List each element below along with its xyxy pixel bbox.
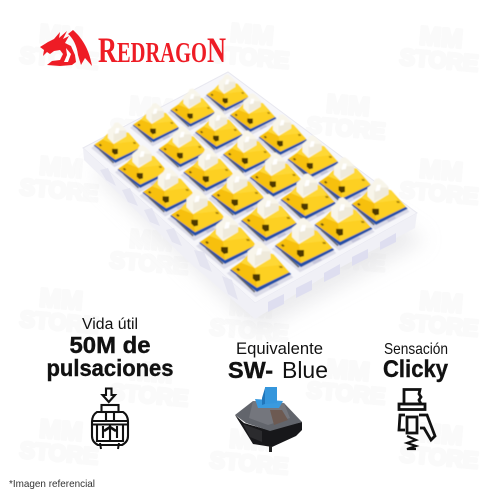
watermark pattern: MM: [228, 290, 274, 324]
text: Equivalente SW- Blue: Blue: [282, 357, 328, 383]
watermark pattern: STORE: [19, 306, 100, 338]
watermark pattern: STORE: [209, 447, 290, 479]
watermark pattern: MM: [325, 353, 371, 387]
text: Sensación Clicky: [383, 341, 449, 383]
watermark pattern: STORE: [399, 309, 480, 341]
watermark pattern: MM: [38, 413, 84, 447]
watermark pattern: STORE: [306, 244, 387, 276]
transparent switch plate with 24 yellow switches: [83, 72, 417, 319]
watermark pattern: MM: [228, 160, 274, 194]
watermark pattern: STORE: [19, 174, 100, 206]
watermark pattern: MM: [418, 20, 464, 54]
text: Equivalente SW- Blue: SW-: [228, 357, 273, 383]
watermark pattern: MM: [325, 88, 371, 122]
text: Sensación Clicky: Clicky: [383, 356, 449, 383]
text: Vida útil 50M de pulsaciones: [46, 316, 174, 381]
watermark pattern: MM: [229, 17, 275, 51]
watermark pattern: STORE: [209, 184, 290, 216]
watermark pattern: MM: [418, 153, 464, 187]
watermark pattern: STORE: [306, 112, 387, 144]
icon: blue mechanical switch: [235, 387, 302, 452]
watermark pattern: STORE: [209, 314, 290, 346]
watermark pattern: STORE: [399, 44, 480, 76]
plate shadow: [90, 160, 425, 330]
watermark pattern: STORE: [19, 42, 100, 74]
watermark pattern: STORE: [109, 379, 190, 411]
watermark pattern: STORE: [210, 41, 290, 73]
text: Equivalente SW- Blue: Equivalente: [236, 340, 323, 358]
watermark pattern: MM: [38, 18, 84, 52]
watermark pattern: STORE: [306, 377, 387, 409]
text: Vida útil 50M de pulsaciones: 50M de: [70, 332, 150, 358]
watermark pattern: STORE: [109, 247, 190, 279]
watermark pattern: STORE: [399, 441, 480, 473]
watermark pattern: MM: [228, 423, 274, 457]
plate front-left side: [83, 148, 255, 319]
watermark pattern: MM: [128, 90, 174, 124]
plate front-right side: [255, 213, 417, 319]
watermark pattern: STORE: [109, 114, 190, 146]
icon: clicky mechanism: [399, 390, 435, 449]
watermark pattern: MM: [38, 150, 84, 184]
text: Vida útil 50M de pulsaciones: Vida útil: [82, 316, 138, 333]
text: Vida útil 50M de pulsaciones: pulsaciones: [46, 355, 174, 381]
icon: dragon: [40, 30, 92, 66]
watermark pattern: MM: [128, 355, 174, 389]
footnote: *Imagen referencial: [9, 478, 95, 490]
switches: [91, 74, 410, 297]
watermark pattern: MM: [418, 417, 464, 451]
logo: Redragon: [40, 30, 226, 70]
watermark pattern: STORE: [399, 177, 480, 209]
watermark pattern: MM: [38, 282, 84, 316]
watermark pattern: STORE: [19, 437, 100, 469]
plate top surface: [83, 72, 417, 303]
watermark pattern: MM: [128, 223, 174, 257]
watermark pattern: MM: [418, 285, 464, 319]
text: Sensación Clicky: Sensación: [384, 341, 448, 358]
icon: keypress lifespan: [92, 388, 128, 449]
text: Equivalente SW- Blue: [228, 340, 328, 383]
logo: Redragon: REDRAGON: [98, 30, 226, 70]
watermark pattern: MM: [325, 220, 371, 254]
